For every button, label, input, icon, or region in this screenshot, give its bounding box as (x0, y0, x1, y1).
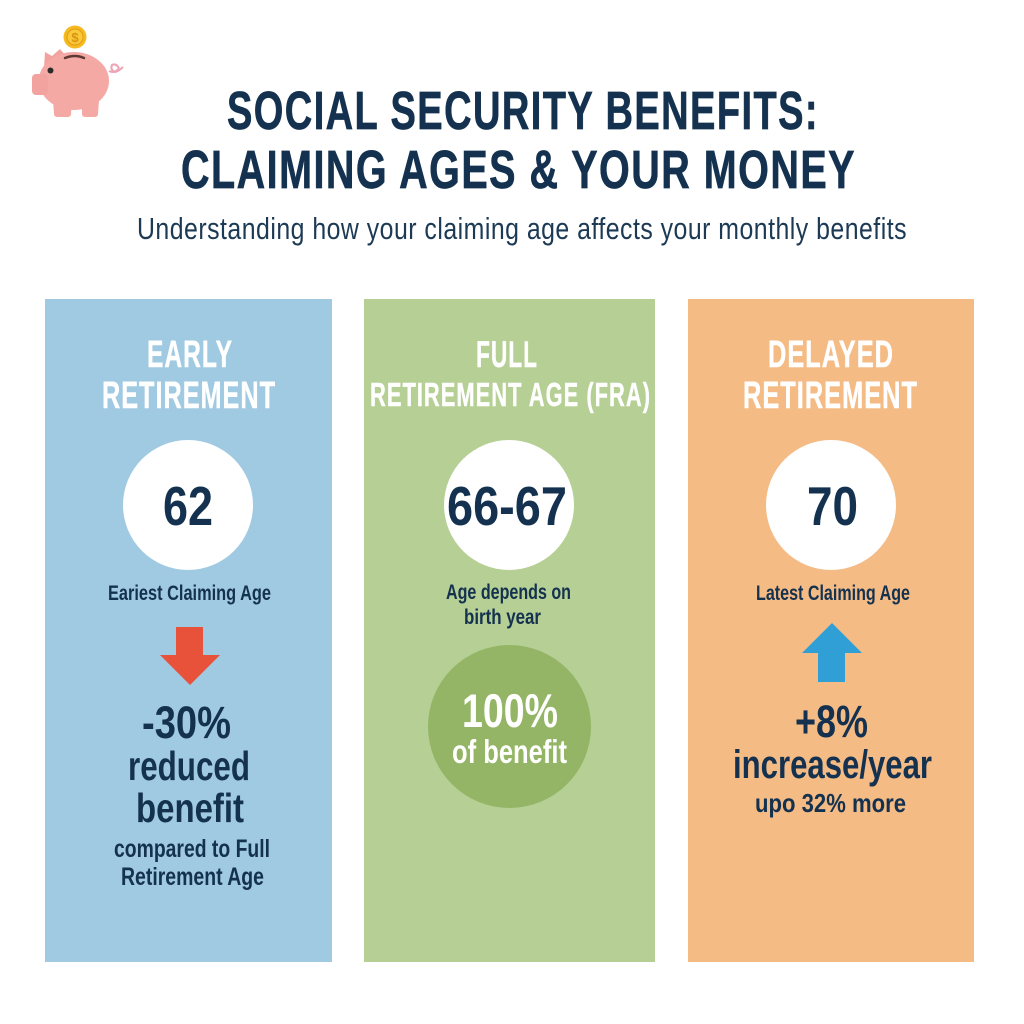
stat: reduced benefit: benefit (136, 785, 244, 831)
age circle: 66-67 (444, 440, 574, 570)
stat: increase per year: increase/year (733, 743, 932, 787)
heading: delayed retirement: RETIREMENT (743, 375, 918, 417)
heading: early retirement: EARLY (147, 334, 233, 376)
stat: reduced benefit: -30% (142, 697, 231, 748)
stat circle: 100% of benefit: of benefit (452, 733, 567, 770)
heading: early retirement: RETIREMENT (102, 375, 276, 417)
note: compared to full retirement age: compared to Full (114, 835, 270, 863)
age circle: 62: 62 (163, 475, 213, 537)
age circle: 66-67: 66-67 (447, 475, 567, 537)
heading: delayed retirement (743, 334, 918, 417)
label: latest claiming age: Latest Claiming Age (756, 582, 910, 605)
label: earliest claiming age: Eariest Claiming Age (108, 582, 271, 605)
stat circle: 100% of benefit: 100% (462, 684, 558, 737)
stat: increase per year: upo 32% more (755, 788, 906, 818)
icon: red down arrow (160, 627, 220, 685)
heading: early retirement (102, 334, 276, 417)
heading: delayed retirement: DELAYED (768, 334, 894, 376)
heading: full retirement age: FULL (476, 334, 538, 375)
age circle: 70: 70 (807, 475, 858, 537)
panel: full retirement age (364, 299, 655, 962)
stat circle: 100% of benefit (428, 645, 591, 808)
stat: reduced benefit (128, 697, 250, 831)
title (181, 81, 856, 200)
icon: blue up arrow (802, 623, 862, 682)
heading: full retirement age (370, 334, 651, 413)
panel: early retirement (45, 299, 332, 962)
icon: piggy bank with coin (32, 26, 123, 117)
label: age depends on birth year (446, 581, 571, 629)
age circle: 62 (123, 440, 253, 570)
stat: increase per year (733, 696, 932, 818)
panel: delayed retirement (688, 299, 974, 962)
icon: piggy bank with coin: $ (71, 30, 79, 45)
note: compared to full retirement age: Retirement Age (121, 863, 264, 891)
label: age depends on birth year: birth year (464, 606, 541, 629)
age circle: 70 (766, 440, 896, 570)
heading: full retirement age: RETIREMENT AGE (FRA) (370, 376, 651, 413)
note: compared to full retirement age (114, 835, 270, 891)
label: age depends on birth year: Age depends on (446, 581, 571, 604)
stat: increase per year: +8% (795, 696, 868, 747)
stat: reduced benefit: reduced (128, 743, 250, 789)
